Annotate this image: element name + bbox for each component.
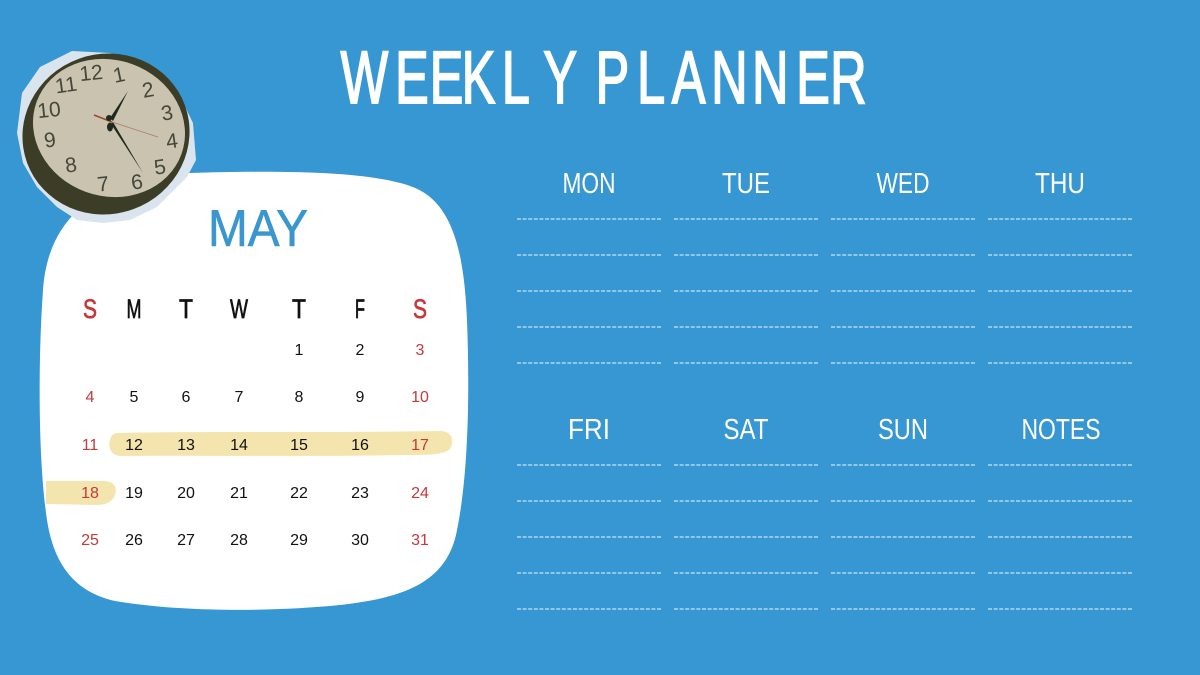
date row 2: 8 [295, 389, 304, 406]
weekday header row [83, 294, 427, 324]
title: WEEKLY PLANNER [341, 38, 867, 119]
clock numerals: 1 [111, 63, 127, 88]
date row 5: 30 [351, 532, 369, 549]
column: THU [988, 168, 1132, 363]
date row 4: 21 [230, 485, 248, 502]
date row 3: 12 [125, 437, 143, 454]
date row 3: 16 [351, 437, 369, 454]
weekday header row: F [355, 294, 365, 324]
date row 5: 31 [411, 532, 429, 549]
column: MON [517, 168, 661, 363]
date row 2: 10 [411, 389, 429, 406]
column: THU: THU [1035, 168, 1085, 200]
date row 1: 3 [416, 342, 425, 359]
clock hands [94, 91, 158, 173]
date row 1: 2 [356, 342, 365, 359]
clock numerals: 3 [159, 101, 175, 126]
column: TUE [674, 168, 818, 363]
date row 5 [81, 532, 429, 549]
date row 2 [86, 389, 429, 406]
date row 2: 5 [130, 389, 139, 406]
date row 2: 6 [182, 389, 191, 406]
date row 5: 26 [125, 532, 143, 549]
clock numerals: 6 [130, 170, 144, 195]
date row 5: 29 [290, 532, 308, 549]
clock paper cutout [17, 51, 196, 223]
date row 2: 4 [86, 389, 95, 406]
date row 3 [82, 437, 429, 454]
clock face [13, 38, 205, 218]
date row 4: 20 [177, 485, 195, 502]
clock numerals: 12 [78, 61, 104, 86]
column: NOTES: NOTES [1022, 414, 1100, 446]
icon: wall clock [0, 30, 212, 238]
date row 4: 18 [81, 485, 99, 502]
clock numerals: 9 [43, 128, 57, 153]
date row 5: 28 [230, 532, 248, 549]
calendar card [40, 172, 468, 610]
weekday header row: T [179, 294, 193, 324]
weekday header row: T [292, 294, 306, 324]
clock numerals: 7 [96, 172, 110, 197]
clock numerals: 8 [64, 153, 78, 178]
panel: upper weekly columns [517, 168, 1132, 363]
column: WED [831, 168, 975, 363]
clock numerals: 11 [54, 73, 78, 98]
weekday header row: S [413, 294, 427, 324]
weekday header row: W [230, 294, 248, 324]
clock numerals: 10 [36, 98, 62, 123]
clock numerals: 2 [140, 78, 156, 103]
clock numerals: 4 [165, 129, 180, 154]
column: NOTES [988, 414, 1132, 609]
panel: monthly calendar [40, 172, 468, 610]
date row 1: 1 [295, 342, 304, 359]
date row 5: 27 [177, 532, 195, 549]
clock numerals: 5 [153, 155, 167, 180]
column: FRI [517, 414, 661, 609]
highlight: week 12 to 17 [109, 431, 452, 456]
weekday header row: M [126, 294, 142, 324]
date row 2: 9 [356, 389, 365, 406]
date row 4: 23 [351, 485, 369, 502]
highlight: day 18 [46, 481, 116, 505]
date row 4: 22 [290, 485, 308, 502]
date row 3: 14 [230, 437, 248, 454]
date row 3: 17 [411, 437, 429, 454]
date row 1 [295, 342, 425, 359]
panel: lower weekly columns [517, 414, 1132, 609]
column: MON: MON [562, 168, 616, 200]
date row 2: 7 [235, 389, 244, 406]
date row 3: 15 [290, 437, 308, 454]
month heading: MAY [208, 200, 308, 258]
date row 4: 24 [411, 485, 429, 502]
date row 3: 13 [177, 437, 195, 454]
column: WED: WED [876, 168, 930, 200]
column: FRI: FRI [568, 414, 610, 446]
column: SUN: SUN [878, 414, 928, 446]
column: SUN [831, 414, 975, 609]
column: SAT [674, 414, 818, 609]
date row 4: 19 [125, 485, 143, 502]
column: TUE: TUE [722, 168, 770, 200]
date row 5: 25 [81, 532, 99, 549]
column: SAT: SAT [724, 414, 769, 446]
clock numerals [36, 61, 180, 197]
weekday header row: S [83, 294, 97, 324]
clock rim [0, 30, 212, 238]
date row 3: 11 [82, 437, 98, 454]
date row 4 [81, 485, 429, 502]
